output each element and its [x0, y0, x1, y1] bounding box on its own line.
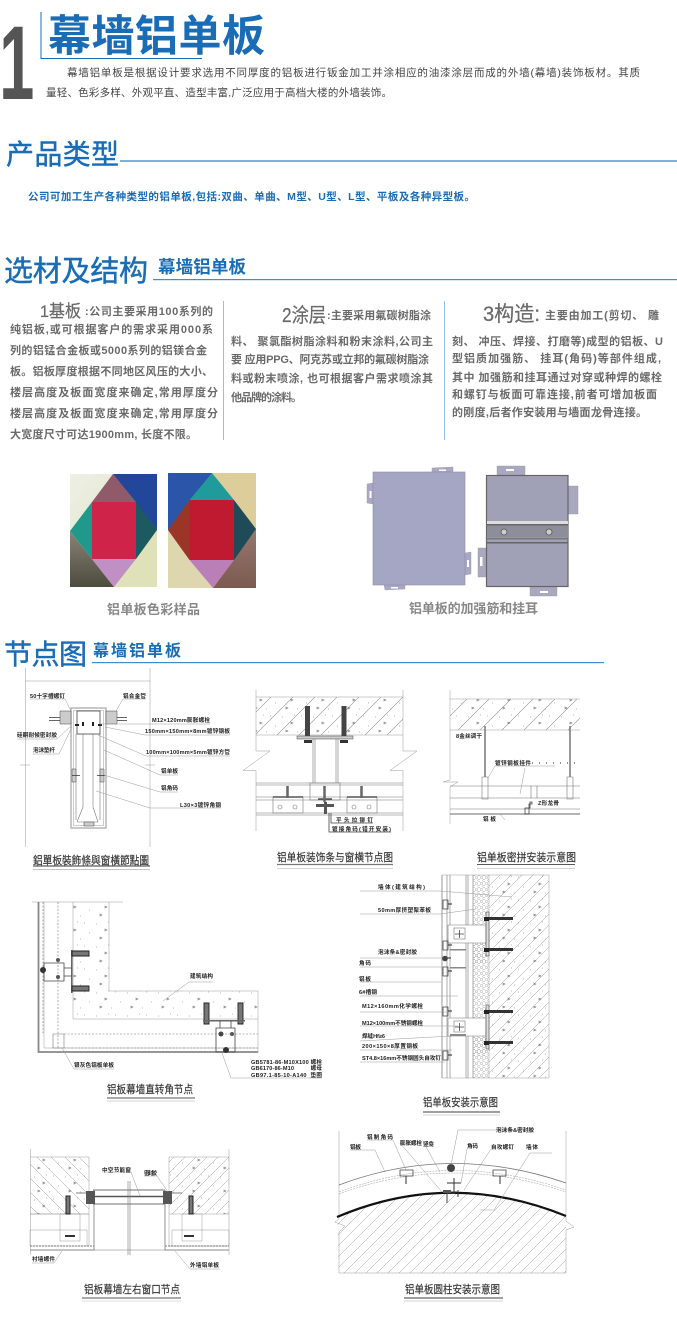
- big number 1: 1: [0, 6, 34, 122]
- column 2: coating: :主要采用氟碳树脂涂: [327, 308, 431, 322]
- drawing 4: right-angle corner node: 建筑结构: [190, 972, 213, 980]
- intro paragraph: [46, 66, 640, 99]
- drawing 5: installation section: 50mm厚挤塑聚苯板: [378, 906, 431, 914]
- caption: drawing 3: [477, 850, 576, 868]
- drawing 5: installation section: [359, 875, 549, 1078]
- drawing 7: round column installation: 泡沫条&密封胶: [496, 1126, 534, 1134]
- caption: drawing 6: [82, 1282, 181, 1301]
- drawing 7: round column installation: 铝制角码: [367, 1133, 393, 1141]
- drawing 4: right-angle corner node: GB5781-86-M10X100 螺栓: [251, 1058, 322, 1066]
- drawing 5: installation section: 焊缝Hf≥6: [362, 1032, 385, 1040]
- panel back with stiffeners: [478, 466, 578, 596]
- drawing 5: installation section: 200×150×8厚置钢板: [362, 1042, 418, 1050]
- caption: drawing 2: [277, 850, 393, 868]
- intro paragraph: 量轻、色彩多样、外观平直、造型丰富,广泛应用于高档大楼的外墙装饰。: [46, 86, 392, 99]
- drawing 4: right-angle corner node: [32, 902, 322, 1079]
- column 1: base plate: 楼层高度及板面宽度来确定,常用厚度分: [10, 406, 218, 420]
- divider: [223, 301, 224, 440]
- drawing 5: installation section: 墙体(建筑结构): [378, 883, 425, 891]
- column 2: coating: 料、 聚氯酯树脂涂料和粉末涂料,公司主: [231, 334, 433, 348]
- drawing 6: left and right window opening node: 衬墙螺件: [32, 1255, 55, 1263]
- drawing 5: installation section: 6#槽钢: [359, 988, 377, 996]
- heading: node diagrams: 幕墙铝单板: [93, 641, 181, 660]
- title: 幕墙铝单板: [48, 13, 265, 61]
- column 1: base plate: [10, 302, 218, 441]
- column 3: construction: 刻、 冲压、焊接、打磨等)成型的铝板、U: [452, 334, 663, 348]
- drawing 3: tight-joint installation: 8金丝调干: [456, 732, 482, 740]
- drawing 2: decorative strip and window cross node: 镀接角码(错开安装): [332, 825, 391, 833]
- drawing 4: right-angle corner node: GB97.1-85-10-A140 垫圈: [251, 1071, 322, 1079]
- drawing 5: installation section: M12×160mm化学螺栓: [362, 1002, 423, 1010]
- caption: colour samples: 铝单板色彩样品: [107, 602, 200, 617]
- column 3: construction: 主要由加工(剪切、 雕: [545, 308, 659, 322]
- column 2: coating: 料或粉末喷涂, 也可根据客户需求喷涂其: [231, 371, 433, 385]
- column 1: base plate: 1基板: [40, 302, 81, 321]
- caption: drawing 3: 铝单板密拼安装示意图: [477, 850, 576, 864]
- drawing 2: decorative strip and window cross node: 平头拉铆钉: [336, 816, 373, 824]
- drawing 6: left and right window opening node: [30, 1149, 229, 1269]
- drawing 1: decorative strip and window node: 铝单板: [161, 767, 178, 775]
- heading: node diagrams: [4, 639, 604, 670]
- drawing 5: installation section: 铝板: [359, 975, 371, 983]
- column 3: construction: 和螺钉与板面可靠连接,前者可增加板面: [452, 387, 657, 401]
- drawing 1: decorative strip and window node: 150mm×150mm×8mm镀锌钢板: [145, 727, 230, 735]
- drawing 7: round column installation: 竖龛: [423, 1140, 434, 1148]
- drawing 5: installation section: M12×100mm不锈钢螺栓: [362, 1019, 423, 1027]
- drawing 1: decorative strip and window node: 50十字槽螺钉: [30, 692, 65, 700]
- drawing 7: round column installation: 自攻螺钉: [491, 1143, 514, 1151]
- column 1: base plate: 板。铝板厚度根据不同地区风压的大小、: [10, 364, 213, 378]
- caption: drawing 7: 铝单板圆柱安装示意图: [405, 1282, 500, 1296]
- drawing 1: decorative strip and window node: L30×3镀锌角钢: [180, 801, 221, 809]
- column 3: construction: 型铝质加强筋、 挂耳(角码)等部件组成,: [452, 351, 661, 365]
- drawing 7: round column installation: [335, 1126, 574, 1273]
- drawing 5: installation section: 角码: [359, 959, 371, 967]
- caption: drawing 4: [107, 1082, 195, 1101]
- drawing 3: tight-joint installation: 镀锌钢板挂件: [495, 759, 531, 767]
- heading: materials and structure: 选材及结构: [4, 255, 148, 288]
- drawing 5: installation section: ST4.8×16mm不锈钢圆头自攻钉: [362, 1054, 441, 1062]
- drawing 3: tight-joint installation: Z形龙骨: [538, 799, 559, 807]
- drawing 1: decorative strip and window node: 铝合金管: [123, 692, 146, 700]
- drawing 7: round column installation: 膨胀螺栓: [400, 1139, 422, 1147]
- heading: materials and structure: 幕墙铝单板: [158, 257, 246, 277]
- drawing 1: decorative strip and window node: 硅酮耐候密封胶: [17, 731, 57, 739]
- column 3: construction: [452, 303, 663, 419]
- column 2: coating: [231, 304, 433, 404]
- drawing 1: decorative strip and window node: M12×120mm膨胀螺栓: [152, 716, 210, 724]
- caption: drawing 2: 铝单板装饰条与窗横节点图: [277, 850, 393, 864]
- heading: node diagrams: 节点图: [4, 639, 87, 670]
- column 3: construction: 3构造:: [483, 303, 540, 326]
- colour sample 2: [168, 473, 256, 588]
- caption: drawing 6: 铝板幕墙左右窗口节点: [84, 1282, 180, 1296]
- drawing 7: round column installation: 角码: [467, 1142, 478, 1150]
- caption: drawing 7: [404, 1282, 503, 1301]
- column 1: base plate: 大宽度尺寸可达1900mm, 长度不限。: [10, 427, 197, 441]
- column 1: base plate: 列的铝锰合金板或5000系列的铝镁合金: [10, 343, 207, 357]
- heading: materials and structure: [4, 255, 677, 288]
- title bracket: [41, 12, 202, 58]
- drawing 4: right-angle corner node: 银灰色铝板单板: [74, 1061, 114, 1069]
- caption: drawing 1: 鋁單板裝飾條與窗橫節點圖: [33, 853, 149, 867]
- divider: [444, 301, 445, 440]
- caption: drawing 5: 铝单板安装示意图: [423, 1095, 498, 1109]
- column 3: construction: 的刚度,后者作安装用与墙面龙骨连接。: [452, 405, 647, 419]
- column 2: coating: 他品牌的涂料。: [231, 390, 302, 404]
- drawing 7: round column installation: 铝板: [350, 1143, 361, 1151]
- column 1: base plate: 纯铝板,或可根据客户的需求采用000系: [10, 322, 213, 336]
- column 3: construction: 其中 加强筋和挂耳通过对穿或种焊的螺栓: [452, 370, 662, 384]
- column 1: base plate: :公司主要采用100系列的: [85, 304, 213, 318]
- caption: drawing 1: [33, 853, 150, 870]
- drawing 1: decorative strip and window node: [17, 668, 230, 847]
- drawing 6: left and right window opening node: 外墙铝单板: [190, 1261, 219, 1269]
- caption: stiffeners and hangers: 铝单板的加强筋和挂耳: [409, 601, 538, 616]
- drawing 3: tight-joint installation: [443, 690, 580, 824]
- column 2: coating: 要 应用PPG、阿克苏或立邦的氟碳树脂涂: [231, 352, 429, 366]
- panel front: [367, 467, 471, 590]
- drawing 2: decorative strip and window cross node: [243, 690, 417, 833]
- drawing 4: right-angle corner node: GB6170-86-M10 螺母: [251, 1064, 322, 1072]
- drawing 7: round column installation: 墙体: [526, 1143, 538, 1151]
- drawing 6: left and right window opening node: 密封胶: [144, 1169, 157, 1177]
- drawing 5: installation section: 泡沫条&密封胶: [378, 948, 417, 956]
- colour sample 1: [70, 474, 157, 587]
- drawing 3: tight-joint installation: 铝板: [483, 815, 496, 823]
- drawing 1: decorative strip and window node: 铝角码: [161, 784, 178, 792]
- drawing 1: decorative strip and window node: 100mm×100mm×5mm镀锌方管: [146, 748, 230, 756]
- drawing 6: left and right window opening node: 中空节能窗: [102, 1166, 131, 1174]
- caption: drawing 5: [423, 1095, 500, 1115]
- product types text: 公司可加工生产各种类型的铝单板,包括:双曲、单曲、M型、U型、L型、平板及各种异型板。: [28, 190, 475, 203]
- column 1: base plate: 楼层高度及板面宽度来确定,常用厚度分: [10, 385, 218, 399]
- heading: product types: 产品类型: [6, 139, 119, 170]
- intro paragraph: 幕墙铝单板是根据设计要求选用不同厚度的铝板进行钣金加工并涂相应的油漆涂层而成的外墙(幕墙)装饰板材。其质: [67, 66, 640, 79]
- column 2: coating: 2涂层: [282, 304, 326, 327]
- caption: drawing 4: 铝板幕墙直转角节点: [107, 1082, 193, 1096]
- drawing 1: decorative strip and window node: 泡沫垫杆: [33, 746, 55, 754]
